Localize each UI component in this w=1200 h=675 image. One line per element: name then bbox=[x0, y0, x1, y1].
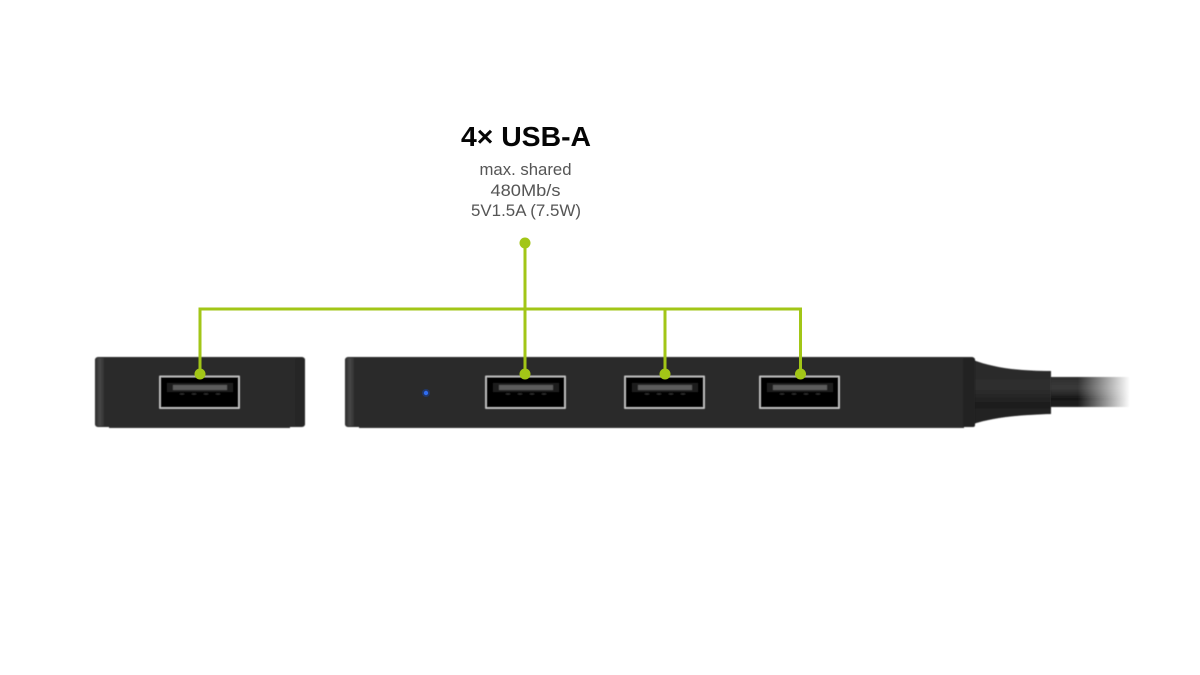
cable bbox=[1050, 377, 1130, 407]
strain relief bbox=[973, 360, 1051, 424]
USB-A port 1 bbox=[160, 376, 239, 408]
left hub body bbox=[109, 426, 290, 428]
USB-A port 2 bbox=[486, 376, 565, 408]
hub section: left end with one port bbox=[95, 357, 305, 428]
USB-A port 4 bbox=[760, 376, 839, 408]
hub section: main body with three ports bbox=[345, 357, 975, 428]
text block: port specifications: max. shared bbox=[480, 161, 572, 179]
text block: port specifications bbox=[471, 161, 581, 220]
main hub body bbox=[359, 426, 964, 428]
heading: 4× USB-A: 4× USB-A bbox=[461, 121, 591, 152]
text block: port specifications: 480Mb/s bbox=[490, 182, 560, 200]
USB-A port 3 bbox=[625, 376, 704, 408]
connector lines from label to ports bbox=[194, 238, 806, 380]
text block: port specifications: 5V1.5A (7.5W) bbox=[471, 202, 581, 220]
LED indicator bbox=[422, 389, 430, 397]
